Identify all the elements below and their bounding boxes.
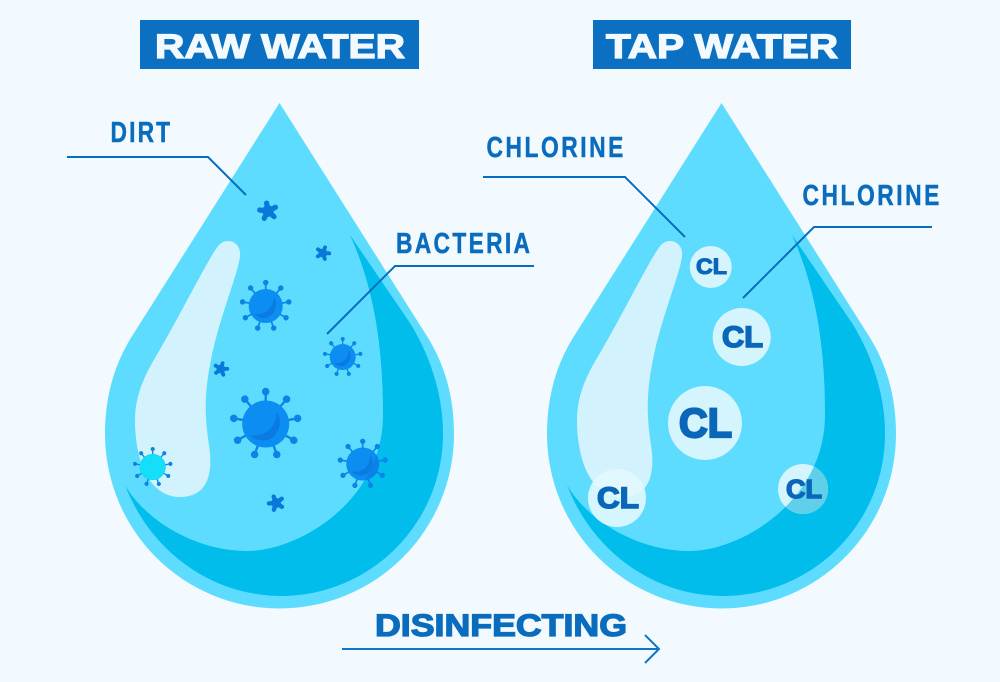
tap water drop [547,103,896,608]
dirt particles [214,202,331,511]
bacterium lower right [338,438,388,488]
drop shadow crescent [567,235,885,596]
drop shadow crescent [125,235,443,596]
drop highlight [135,241,240,497]
chlorine molecule 2 [713,308,771,366]
drop body [105,103,454,608]
label: bacteria [327,229,534,334]
bacterium right [323,337,363,377]
label: dirt [67,118,246,195]
dirt particle top [259,202,277,219]
label: chlorine right [743,181,939,298]
label: dirt: DIRT [110,118,170,149]
disinfecting text: DISINFECTING [375,607,627,643]
drop body [547,103,896,608]
chlorine molecule 4 [588,469,646,527]
heading: raw water [140,20,419,69]
heading: tap water [593,20,851,69]
disinfecting label and arrow [342,607,659,663]
raw water drop [105,103,454,608]
dirt particle upper right [316,245,331,260]
label: bacteria: BACTERIA [396,229,530,260]
dirt particle bottom [267,494,284,511]
bacterium upper [239,280,292,332]
chlorine molecule 4: CL [597,482,639,515]
drop highlight [577,241,682,497]
label: chlorine right: CHLORINE [802,181,939,212]
chlorine molecule 1: CL [696,254,727,279]
chlorine molecule 5: CL [786,474,822,504]
chlorine molecule 2: CL [722,321,763,354]
label: chlorine left [483,133,685,237]
bacteria group [133,280,388,488]
label: chlorine left: CHLORINE [486,133,623,164]
bacterium in highlight [133,447,173,487]
heading: raw water: RAW WATER [155,28,405,66]
dirt particle left [214,362,228,375]
chlorine molecule 3: CL [679,400,732,446]
bacterium large [229,388,302,459]
process arrow [342,635,659,663]
heading: tap water: TAP WATER [606,28,838,66]
chlorine molecule 1 [690,246,732,288]
chlorine molecule 3 [668,386,742,460]
chlorine molecule 5 [778,464,828,514]
